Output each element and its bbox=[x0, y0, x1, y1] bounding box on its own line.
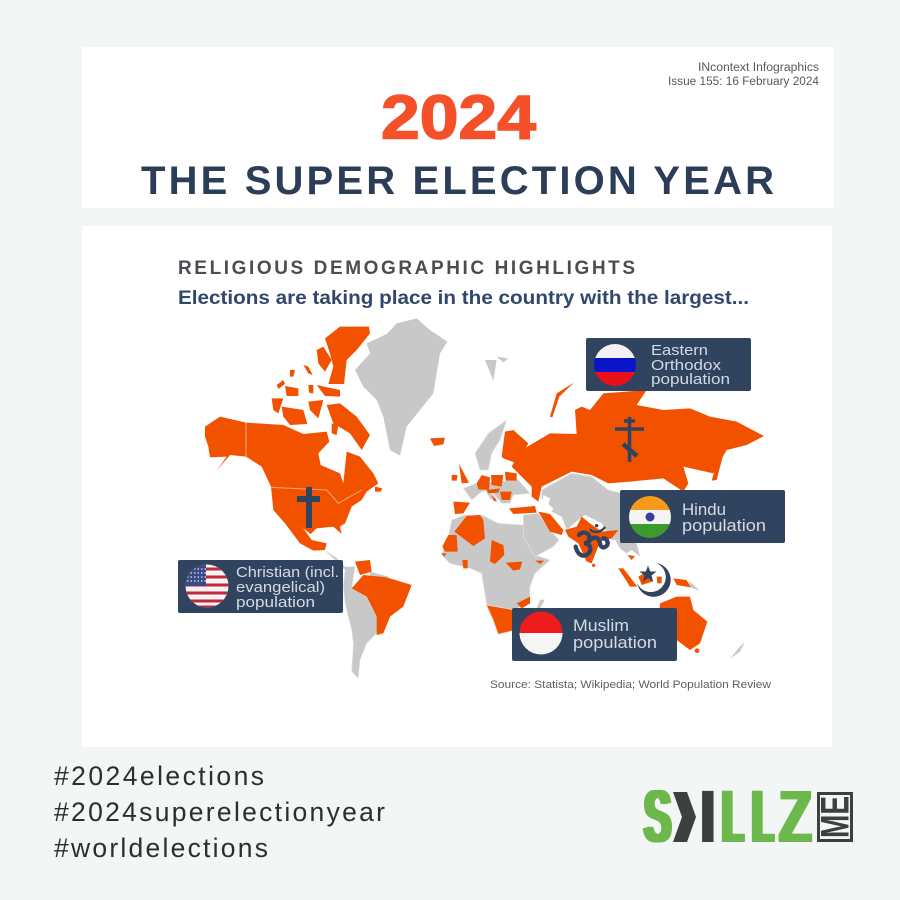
Pakistan and India bbox=[565, 517, 618, 563]
map: Europe, Africa and southern Asia bbox=[441, 420, 622, 610]
callout text: population bbox=[682, 516, 766, 535]
callout text: Muslim bbox=[573, 616, 629, 635]
Scandinavia bbox=[475, 420, 507, 470]
logo ME badge: ME bbox=[814, 796, 858, 838]
Greece bbox=[492, 495, 497, 502]
map: northern and eastern Eurasia and Oceania bbox=[485, 357, 764, 659]
logo letter S: S bbox=[644, 775, 671, 858]
Brazil bbox=[352, 575, 412, 635]
callout text: Orthodox bbox=[651, 357, 722, 374]
Turkey bbox=[509, 506, 537, 514]
callout text: Christian (incl. bbox=[236, 564, 339, 581]
callout text bbox=[651, 342, 730, 388]
logo letter Z: Z bbox=[780, 775, 811, 858]
Iran bbox=[538, 512, 563, 535]
Borneo bbox=[638, 570, 652, 585]
panel subheading: Elections are taking place in the country with the largest... bbox=[178, 288, 749, 309]
Madagascar bbox=[536, 599, 545, 612]
issue credit: INcontext Infographics bbox=[698, 62, 819, 74]
world map bbox=[205, 318, 764, 678]
flag: Indonesia bbox=[519, 611, 563, 655]
flag: USA bbox=[185, 564, 229, 608]
Arctic islands bbox=[325, 327, 370, 384]
Mauritania bbox=[442, 535, 458, 552]
flag: India bbox=[629, 496, 671, 538]
New Guinea bbox=[673, 578, 691, 587]
Finland bbox=[502, 430, 528, 463]
Sulawesi bbox=[657, 577, 662, 583]
icon: Orthodox cross bbox=[615, 417, 644, 462]
Italy bbox=[485, 490, 498, 503]
Senegal bbox=[441, 553, 447, 557]
Mexico bbox=[285, 523, 327, 551]
issue credit bbox=[668, 62, 820, 88]
Poland and Belarus bbox=[505, 472, 517, 481]
hashtags bbox=[54, 761, 385, 863]
Romania bbox=[500, 492, 512, 500]
Chad bbox=[490, 540, 504, 564]
Spain bbox=[453, 502, 470, 514]
Greenland bbox=[355, 318, 447, 456]
icon: Latin cross bbox=[297, 487, 320, 528]
callout text: population bbox=[651, 371, 730, 388]
callout text: evangelical) bbox=[236, 579, 325, 596]
callout text: population bbox=[573, 633, 657, 652]
Iceland bbox=[430, 438, 445, 446]
callout: Christian population bbox=[178, 560, 343, 613]
callout text bbox=[573, 616, 657, 652]
logo letter I: I bbox=[701, 775, 715, 858]
Sakhalin bbox=[712, 452, 724, 481]
title: main heading: THE SUPER ELECTION YEAR bbox=[141, 159, 774, 203]
hashtags: #2024superelectionyear bbox=[54, 797, 385, 827]
Canada, Alaska and USA bbox=[205, 417, 378, 534]
callout: Eastern Orthodox population bbox=[586, 338, 751, 391]
map: the Americas and North Atlantic bbox=[205, 318, 447, 678]
Novaya Zemlya bbox=[550, 383, 574, 417]
callout text: Hindu bbox=[682, 500, 726, 519]
source note: Source: Statista; Wikipedia; World Population Review bbox=[490, 679, 771, 691]
Southern Africa bbox=[487, 605, 515, 634]
panel: religious demographics bbox=[82, 226, 832, 747]
Ghana bbox=[462, 560, 468, 568]
Somaliland bbox=[535, 561, 544, 564]
Papua New Guinea bbox=[688, 581, 700, 591]
callout: Hindu population bbox=[620, 490, 785, 543]
callout text bbox=[236, 564, 339, 611]
Australia bbox=[658, 597, 707, 650]
icon: crescent and star bbox=[637, 563, 671, 597]
callout text: Eastern bbox=[651, 342, 708, 359]
issue credit: Issue 155: 16 February 2024 bbox=[668, 76, 820, 88]
Middle East bbox=[523, 513, 559, 557]
hashtags: #2024elections bbox=[54, 761, 264, 791]
Central Asia and China bbox=[542, 473, 622, 540]
Southeast Asia bbox=[613, 537, 640, 557]
France bbox=[477, 475, 490, 490]
icon: Om symbol bbox=[576, 524, 608, 556]
logo letter L: L bbox=[753, 776, 773, 859]
Caspian Sea bbox=[542, 495, 552, 514]
South and Central America, grey countries bbox=[325, 551, 378, 678]
logo: SKILLZ ME bbox=[644, 775, 858, 859]
callout: Muslim population bbox=[512, 608, 677, 661]
Myanmar bbox=[627, 555, 635, 560]
Svalbard bbox=[485, 360, 497, 381]
logo letter L: L bbox=[723, 776, 743, 859]
Central Europe bbox=[487, 488, 500, 493]
logo chevron bbox=[673, 792, 696, 842]
Germany bbox=[491, 475, 503, 487]
callout text bbox=[682, 500, 766, 535]
Mozambique bbox=[517, 597, 530, 608]
hashtags: #worldelections bbox=[54, 833, 268, 863]
Russia bbox=[512, 390, 764, 502]
title: year: 2024 bbox=[381, 84, 537, 152]
Africa bbox=[442, 515, 550, 610]
national borders bbox=[246, 423, 362, 503]
Sri Lanka bbox=[592, 564, 595, 567]
panel heading: RELIGIOUS DEMOGRAPHIC HIGHLIGHTS bbox=[178, 258, 635, 279]
Europe bbox=[463, 480, 530, 503]
South Sudan bbox=[506, 562, 522, 571]
New Zealand bbox=[730, 642, 745, 659]
flag: Russia bbox=[594, 344, 636, 386]
callout text: population bbox=[236, 594, 315, 611]
Algeria bbox=[454, 515, 485, 546]
Sumatra and Java bbox=[618, 568, 637, 587]
UK and Ireland bbox=[459, 464, 469, 483]
panel: header bbox=[82, 47, 834, 208]
Venezuela bbox=[355, 560, 372, 575]
